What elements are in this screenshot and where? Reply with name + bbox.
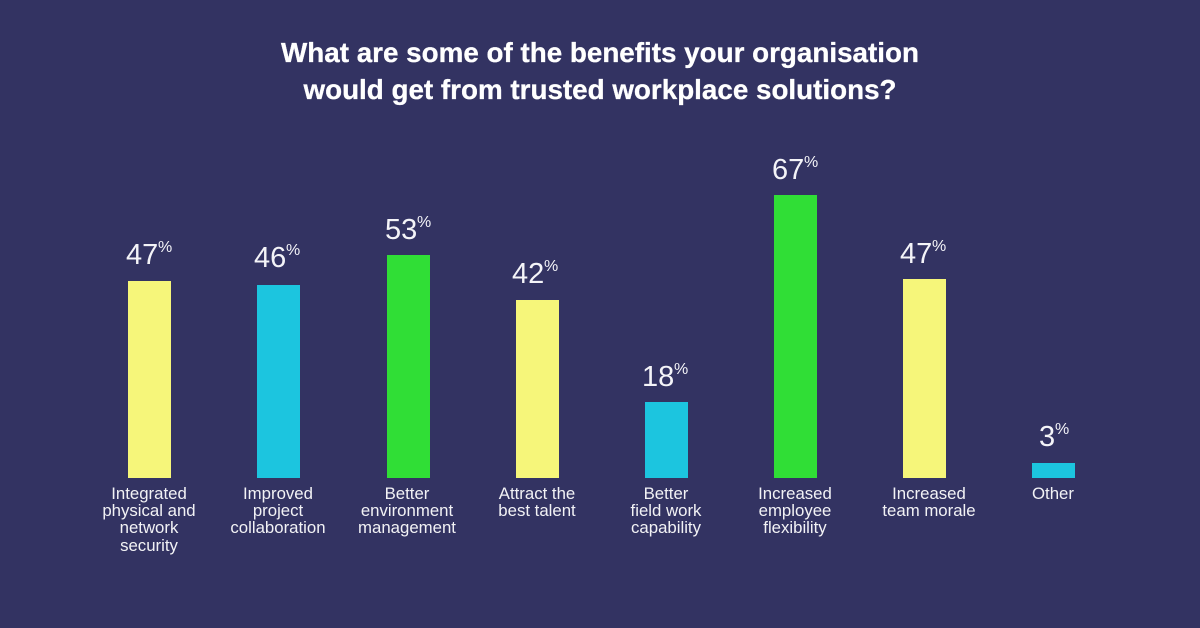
- label: team morale: [882, 484, 976, 520]
- value: 47%: [900, 238, 946, 270]
- bar group: project collaboration 46%: [230, 242, 326, 537]
- value: 46%: %: [286, 242, 300, 259]
- label: project collaboration: collaboration: [230, 518, 326, 537]
- value: 67%: 67: [772, 154, 804, 186]
- label: environment management: management: [358, 518, 456, 537]
- bar: 42%: [516, 300, 558, 478]
- title: What are some of the benefits your organisation: [281, 37, 919, 68]
- value: 67%: [772, 154, 818, 186]
- label: integrated security: security: [120, 536, 178, 555]
- label: employee flexibility: flexibility: [763, 518, 827, 537]
- value: 42%: %: [544, 258, 558, 275]
- label: field work: [630, 484, 702, 537]
- bar group: best talent 42%: [498, 258, 576, 520]
- bar group: field work 18%: [630, 361, 702, 537]
- value: 53%: 53: [385, 214, 417, 246]
- label: employee flexibility: Increased: [758, 484, 832, 502]
- value: 3%: [1039, 421, 1069, 453]
- bar: 3%: [1032, 463, 1074, 478]
- label: project collaboration: project: [253, 501, 303, 520]
- label: environment management: Better: [385, 484, 429, 502]
- value: 46%: [254, 242, 300, 274]
- label: environment management: [358, 484, 456, 537]
- value: 47%: %: [158, 239, 172, 256]
- bar: 47%: [903, 279, 946, 478]
- value: 47%: %: [932, 238, 946, 255]
- value: 53%: %: [417, 214, 431, 231]
- title: would get from trusted workplace solutions?: [303, 74, 897, 105]
- bar: 18%: [645, 402, 688, 478]
- label: best talent: [498, 484, 576, 520]
- label: integrated security: network: [120, 518, 178, 537]
- bar group: integrated security 47%: [102, 239, 196, 555]
- label: project collaboration: Improved: [243, 484, 313, 502]
- label: best talent: best talent: [498, 501, 576, 520]
- label: integrated security: [102, 484, 196, 555]
- label: team morale: Increased: [892, 484, 966, 502]
- bar group: employee flexibility 67%: [758, 154, 832, 537]
- value: 18%: %: [674, 361, 688, 378]
- value: 47%: 47: [900, 238, 932, 270]
- label: project collaboration: [230, 484, 326, 537]
- bar group: other 3%: [1032, 421, 1075, 502]
- label: field work: field work: [631, 501, 701, 520]
- bar group: team morale 47%: [882, 238, 976, 520]
- value: 53%: [385, 214, 431, 246]
- bar: 53%: [387, 255, 430, 478]
- value: 18%: [642, 361, 688, 393]
- value: 3%: %: [1055, 421, 1069, 438]
- bar: 67%: [774, 195, 816, 478]
- value: 47%: 47: [126, 239, 158, 271]
- label: other: Other: [1032, 484, 1074, 502]
- value: 67%: %: [804, 154, 818, 171]
- label: employee flexibility: employee: [759, 501, 831, 520]
- value: 3%: 3: [1039, 421, 1055, 453]
- bar chart: [102, 154, 1075, 555]
- label: field work: capability: [631, 518, 701, 537]
- value: 42%: 42: [512, 258, 544, 290]
- bar group: environment management 53%: [358, 214, 456, 537]
- title: [280, 37, 919, 106]
- label: employee flexibility: [758, 484, 832, 537]
- bar: 47%: [128, 281, 170, 478]
- label: best talent: Attract the: [499, 484, 575, 502]
- value: 47%: [126, 239, 172, 271]
- label: field work: Better: [644, 484, 688, 502]
- bar: 46%: [257, 285, 300, 478]
- value: 46%: 46: [254, 242, 286, 274]
- label: integrated security: physical and: [102, 501, 196, 520]
- value: 42%: [512, 258, 558, 290]
- value: 18%: 18: [642, 361, 674, 393]
- label: integrated security: Integrated: [111, 484, 187, 502]
- label: environment management: environment: [361, 501, 453, 520]
- label: team morale: team morale: [882, 501, 976, 520]
